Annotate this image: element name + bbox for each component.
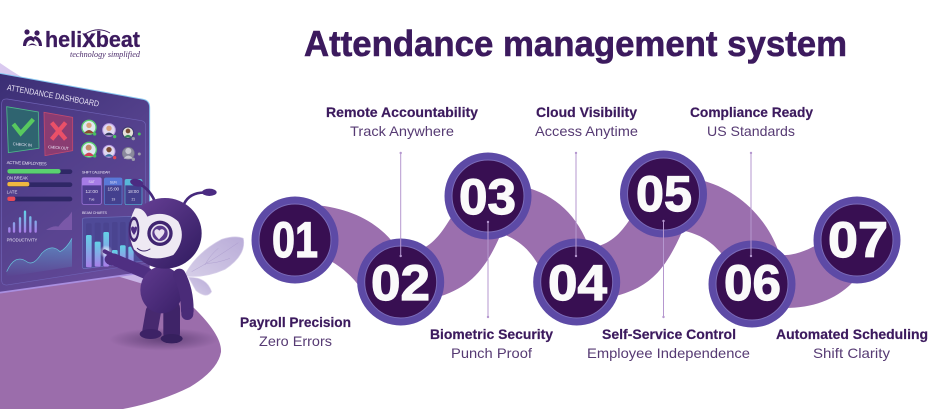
- label: payroll precision: [240, 314, 351, 349]
- left eye: [129, 217, 139, 242]
- background lavender shape: [0, 63, 60, 120]
- label: remote accountability: Track Anywhere: [350, 123, 454, 139]
- mini productivity chart: [7, 212, 72, 277]
- side arm: [179, 275, 193, 320]
- label: biometric security: Punch Proof: [451, 345, 532, 361]
- check in button: [7, 107, 39, 153]
- check out button: [44, 112, 73, 156]
- step 03 badge: 03: [459, 169, 516, 225]
- ribbon path connecting the steps: [315, 180, 852, 308]
- label: biometric security: [430, 326, 553, 361]
- check out button: CHECK OUT: [48, 144, 69, 151]
- step 06 badge: 06: [724, 255, 781, 311]
- step 02 badge: 02: [371, 255, 430, 311]
- logo icon: [23, 29, 42, 46]
- step 07 badge: 07: [828, 212, 888, 268]
- dashboard title: ATTENDANCE DASHBOARD: [6, 82, 100, 109]
- right eye: [147, 221, 173, 246]
- status progress bars: ON BREAK: [7, 175, 28, 180]
- attendance dashboard screen: [0, 73, 150, 293]
- label: biometric security: Biometric Security: [430, 326, 553, 342]
- wings: [185, 237, 244, 295]
- logo: [23, 25, 141, 59]
- label: self-service control: [587, 326, 750, 361]
- status progress bars: ACTIVE EMPLOYEES: [7, 160, 47, 166]
- step 07 badge: [814, 196, 900, 284]
- shift calendar: [82, 170, 142, 205]
- check in button: CHECK IN: [13, 141, 32, 148]
- connector dots over badges: [400, 152, 752, 318]
- label: cloud visibility: Access Anytime: [535, 123, 638, 139]
- mini productivity chart: PRODUCTIVITY: [7, 237, 38, 242]
- smile: [137, 248, 150, 251]
- torso: [140, 267, 183, 313]
- shift calendar: 12:00: [85, 189, 98, 195]
- mascot bee: [105, 177, 244, 351]
- shift calendar: SHIFT CALENDAR: [82, 170, 110, 174]
- logo swoosh: [85, 30, 110, 34]
- connector lines: [401, 153, 751, 317]
- shift calendar: SAT: [89, 180, 95, 184]
- shift calendar: 21: [131, 198, 135, 202]
- background purple blob: [0, 274, 221, 409]
- step 02 badge: [357, 238, 444, 326]
- employee avatars: [82, 120, 141, 161]
- step 06 badge: [708, 240, 796, 328]
- step 05 badge: 05: [636, 166, 692, 222]
- label: cloud visibility: Cloud Visibility: [536, 104, 637, 120]
- label: cloud visibility: [535, 104, 638, 139]
- status progress bars: [7, 160, 72, 201]
- title: Attendance management system: [304, 23, 847, 64]
- label: compliance ready: Compliance Ready: [690, 104, 813, 120]
- ground shadow: [109, 328, 219, 351]
- shift calendar: 18:00: [128, 189, 139, 194]
- label: compliance ready: [690, 104, 813, 139]
- shift calendar: 15:00: [107, 187, 120, 192]
- label: payroll precision: Zero Errors: [259, 333, 332, 349]
- label: self-service control: Employee Independence: [587, 345, 750, 361]
- bar charts panel: [82, 211, 147, 269]
- antennae: [129, 177, 217, 204]
- label: self-service control: Self-Service Control: [602, 326, 736, 342]
- label: compliance ready: US Standards: [707, 123, 795, 139]
- step 04 badge: [533, 238, 620, 326]
- label: remote accountability: [326, 104, 478, 139]
- shift calendar: Tue: [89, 198, 95, 202]
- lavender wedge under the screen: [105, 268, 149, 288]
- step 01 badge: [252, 196, 338, 284]
- label: remote accountability: Remote Accountability: [326, 104, 478, 120]
- bar charts panel: BEAM CHARTS: [82, 211, 108, 215]
- logo tagline: technology simplified: [70, 50, 141, 59]
- shift calendar: SUN: [110, 181, 117, 185]
- shift calendar: 19: [111, 198, 115, 202]
- label: automated scheduling: [776, 326, 928, 361]
- step 04 badge: 04: [548, 255, 607, 311]
- label: payroll precision: Payroll Precision: [240, 314, 351, 330]
- label: automated scheduling: Automated Scheduling: [776, 326, 928, 342]
- head: [128, 198, 202, 269]
- logo wordmark: helixbeat: [45, 25, 141, 53]
- step 01 badge: 01: [272, 212, 318, 268]
- face plate: [129, 208, 182, 258]
- status progress bars: LATE: [7, 190, 17, 195]
- label: automated scheduling: Shift Clarity: [813, 345, 890, 361]
- step 05 badge: [620, 150, 707, 238]
- pointing arm: [105, 251, 147, 273]
- step 03 badge: [444, 152, 532, 240]
- legs and feet: [140, 308, 183, 343]
